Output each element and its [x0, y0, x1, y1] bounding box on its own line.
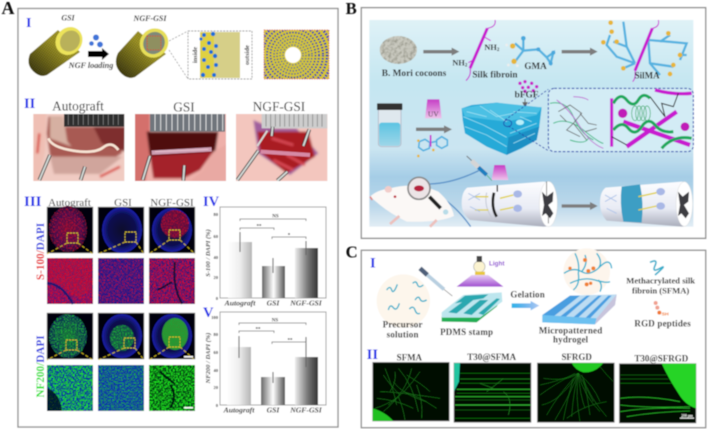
micrograph labels: SFRGD [561, 352, 592, 362]
silk fibroin chain [466, 20, 495, 81]
panel A frame [18, 8, 338, 427]
label SilMA: SilMA [635, 71, 660, 81]
inset wall section: inside [192, 47, 199, 63]
GMA molecule [505, 36, 555, 67]
bar chart NF200: 40 [214, 368, 219, 373]
bar chart NF200: GSI [267, 406, 280, 414]
hydrogel network [563, 248, 612, 295]
labels NH2: NH [484, 43, 497, 52]
label Autograft: Autograft [52, 98, 104, 114]
bar chart S-100: NS [272, 214, 279, 220]
row label S-100/DAPI: S-100/DAPI [35, 223, 47, 280]
label NGF-GSI: NGF-GSI [133, 14, 167, 23]
label NGF loading: NGF loading [68, 61, 113, 70]
row label NF200/DAPI: NF200/DAPI [35, 335, 47, 398]
label PDMS stamp: PDMS stamp [440, 327, 493, 337]
bar chart S-100: 60 [214, 234, 219, 239]
micrographs NF200 overview [47, 313, 195, 360]
arrow NGF loading [88, 48, 109, 60]
fibre mesh cross-section [263, 29, 330, 80]
injection curves [430, 170, 480, 227]
bar chart S-100 [205, 207, 326, 308]
label silk fibroin: Silk fibroin [472, 71, 518, 81]
arrow bFGF to hydrogel [523, 99, 527, 107]
molecular inset [548, 88, 693, 152]
hydrogel block [462, 103, 542, 155]
section I heading: I [370, 255, 376, 271]
column label GSI: GSI [114, 197, 132, 209]
light cone [457, 275, 503, 287]
bar chart S-100: ** [256, 224, 262, 230]
bar chart NF200: 80 [214, 332, 219, 337]
label UV: UV [428, 110, 439, 119]
label micropatterned hydrogel: Micropatterned [539, 325, 602, 335]
panel B frame [361, 8, 706, 238]
bar chart NF200: NS [272, 318, 278, 324]
panel A [2, 0, 338, 427]
syringe [467, 156, 492, 181]
icon RGD [654, 301, 669, 318]
micrograph labels: T30@SFMA [467, 352, 517, 362]
UV lamp [425, 99, 442, 118]
small UV lamp [492, 165, 508, 180]
rat [370, 186, 454, 227]
section II heading: II [367, 347, 378, 363]
micrograph labels [397, 352, 689, 364]
column label Autograft: Autograft [48, 197, 91, 209]
bar chart NF200: 0 [216, 403, 219, 408]
micrograph labels: T30@SFRGD [634, 354, 689, 364]
arrow jar to hydrogel [416, 125, 452, 133]
section III heading: III [24, 194, 42, 210]
label GMA: GMA [524, 61, 547, 71]
cylinder NGF-GSI [116, 23, 174, 78]
bar chart NF200: ** [256, 328, 261, 332]
SilMA molecule [601, 20, 687, 82]
section V heading: V [203, 305, 214, 321]
section IV heading: IV [203, 194, 220, 210]
schematic background [369, 20, 693, 227]
bFGF particles [518, 80, 538, 93]
icon RGD: SH [662, 312, 669, 318]
bar chart NF200 [205, 312, 326, 414]
micrographs S-100 overview [47, 206, 195, 254]
micrographs S-100 zoomed [47, 258, 195, 304]
gelation arrow [512, 301, 539, 310]
section I heading: I [26, 16, 31, 31]
label light: Light [489, 261, 505, 268]
bar chart S-100: 40 [214, 255, 219, 260]
repaired nerve conduit [600, 182, 693, 227]
labels NH2: 2 [465, 64, 468, 69]
label NGF-GSI photo: NGF-GSI [253, 99, 305, 114]
label gelation: Gelation [510, 289, 545, 299]
bar chart NF200: ** [288, 338, 293, 344]
micrograph labels: SFMA [397, 353, 423, 363]
magnifier on wound [408, 177, 441, 208]
micrograph T30@SFMA [454, 363, 531, 422]
syringe [420, 268, 452, 296]
cylinder GSI [29, 22, 88, 76]
arrow between conduits [562, 202, 598, 210]
bar chart NF200: NGF-GSI [289, 406, 323, 414]
bar chart NF200: 60 [214, 350, 219, 355]
panel C frame [361, 250, 706, 428]
micrographs NF200 zoomed [47, 365, 195, 411]
cocoon [380, 36, 417, 64]
label GSI photo: GSI [173, 100, 195, 114]
jar [377, 103, 402, 147]
bar chart NF200: NF200 / DAPI (%) [205, 333, 212, 384]
micrograph SFMA [373, 362, 449, 421]
inset wall section [169, 31, 252, 79]
photo GSI [134, 114, 226, 182]
arrow GMA to SilMA [562, 48, 598, 56]
zoom guide lines [505, 89, 548, 151]
labels NH2: NH [452, 59, 465, 68]
bar chart S-100: S-100 / DAPI (%) [205, 229, 212, 277]
micrograph T30@SFRGD [619, 364, 696, 423]
PDMS stamp [442, 292, 502, 322]
bar chart NF200: Autograft [223, 406, 255, 414]
label micropatterned hydrogel: hydrogel [553, 335, 589, 345]
label precursor solution: Precursor [383, 320, 423, 330]
bar chart NF200: 20 [214, 385, 219, 390]
bar chart S-100: NGF-GSI [289, 298, 323, 308]
micrograph T30@SFRGD: 200 μm [681, 414, 693, 418]
bar chart S-100: 0 [216, 296, 219, 301]
bar chart S-100: Autograft [224, 298, 256, 308]
panel C [346, 243, 706, 428]
light bulb [474, 256, 485, 275]
bar chart S-100: 80 [214, 212, 219, 217]
precursor droplet [377, 274, 430, 328]
label RGD peptides: RGD peptides [634, 319, 691, 329]
label bFGF: bFGF [515, 90, 539, 100]
label cocoons: B. Mori cocoons [382, 69, 447, 79]
surgery photos [30, 110, 331, 184]
labels NH2: 2 [497, 48, 500, 53]
label SFMA: fibroin (SFMA) [632, 285, 689, 295]
panel letter C: C [346, 243, 358, 262]
injured nerve conduit [462, 181, 557, 227]
label precursor solution: solution [387, 330, 419, 340]
label SFMA: Methacrylated silk [626, 275, 695, 285]
photoinitiator molecule [417, 135, 447, 157]
bar chart S-100: GSI [267, 298, 280, 308]
bar chart NF200: 100 [211, 315, 219, 320]
icon SFMA [650, 261, 663, 275]
section II heading: II [24, 96, 36, 112]
panel B [346, 0, 706, 238]
label GSI: GSI [61, 14, 76, 22]
photo Autograft [32, 113, 125, 182]
inset wall section: outside [244, 45, 251, 65]
labels NH2 [452, 43, 500, 69]
bar chart S-100: * [288, 234, 291, 238]
micrograph SFRGD [537, 363, 614, 422]
micropatterned hydrogel [542, 294, 617, 324]
arrow cocoon to fibroin [423, 48, 459, 56]
bar chart S-100: 20 [214, 275, 219, 280]
NGF particles [89, 34, 103, 47]
column label NGF-GSI: NGF-GSI [150, 197, 194, 209]
photo NGF-GSI [236, 114, 328, 182]
